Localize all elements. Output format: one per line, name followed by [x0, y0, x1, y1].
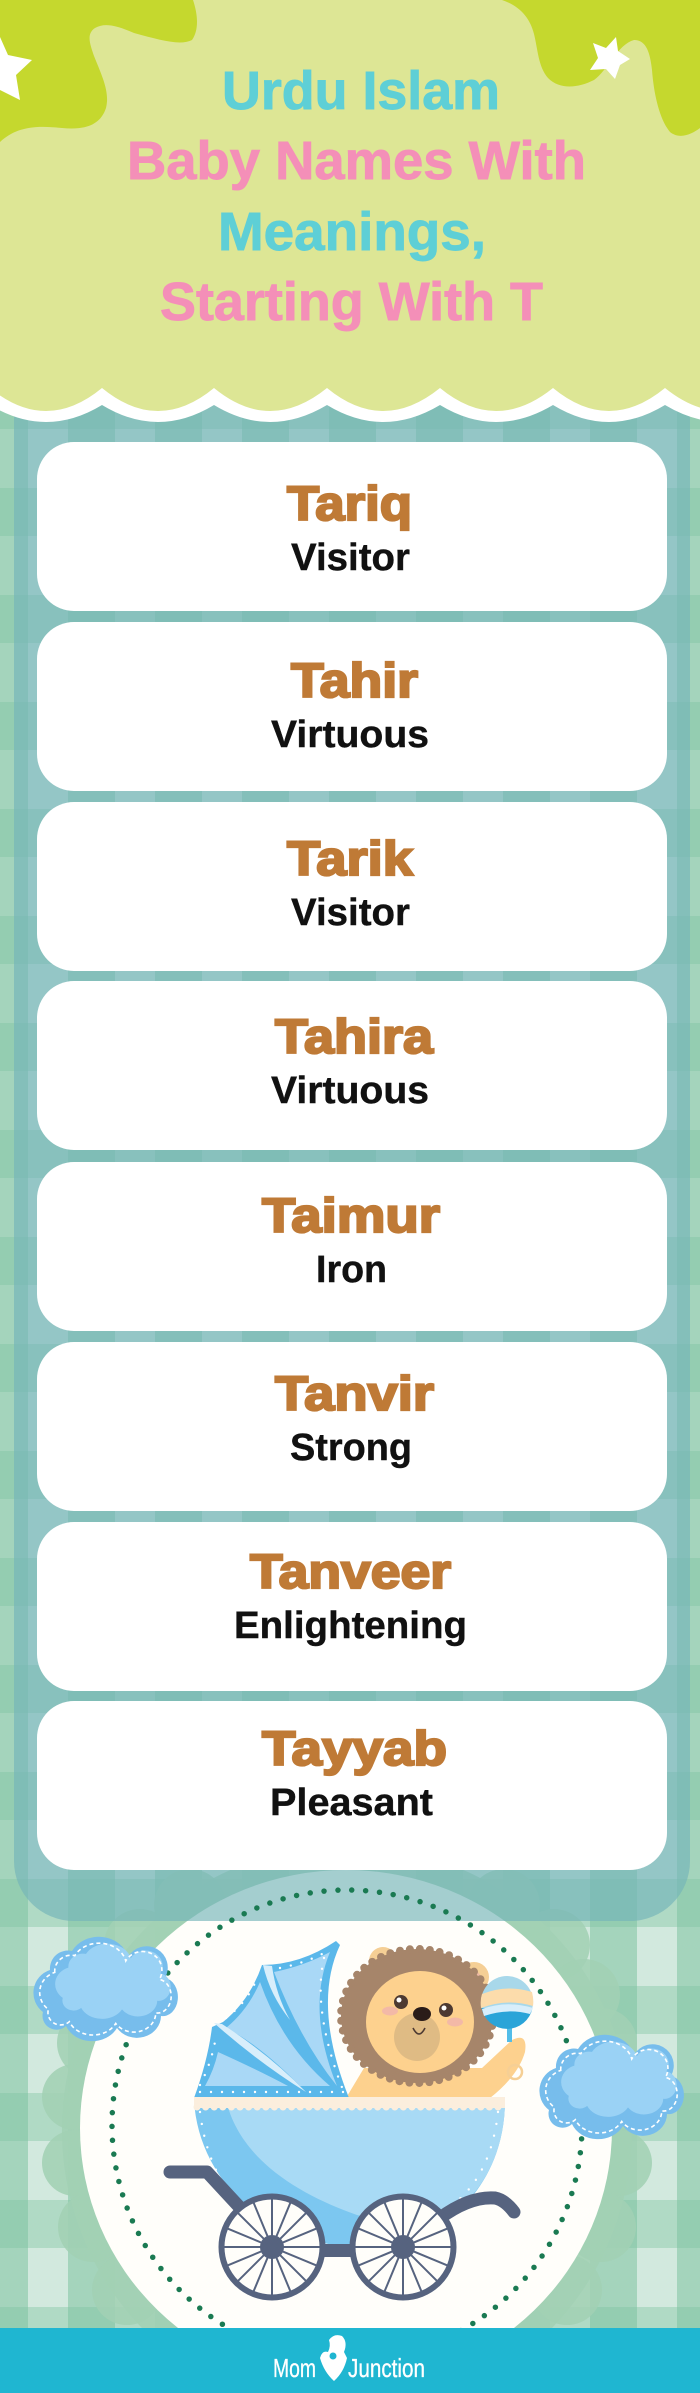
logo text right: Junction	[348, 2353, 425, 2383]
title line 3: Meanings,	[218, 202, 486, 262]
rattle cream band	[481, 1988, 533, 2008]
lion ear left	[369, 1947, 397, 1975]
name: Taimur	[262, 1190, 440, 1243]
lime blob top right	[502, 0, 700, 136]
meaning: Virtuous	[271, 1070, 429, 1112]
logo text left: Mom	[273, 2353, 316, 2383]
card: Tanvir	[37, 1342, 667, 1511]
lime blob top left	[0, 0, 197, 142]
handle left	[170, 2172, 244, 2212]
name: Tahir	[291, 655, 418, 708]
wheel right	[352, 2196, 454, 2298]
canopy silhouette	[194, 1941, 349, 2098]
header background	[0, 0, 700, 411]
card: Tarik	[37, 802, 667, 971]
cream circle behind stroller	[80, 1870, 612, 2328]
scalloped white edge	[0, 0, 700, 422]
logo icon: mother and child	[320, 2335, 347, 2381]
canopy stitches	[200, 1949, 346, 2092]
title line 2: Baby Names With	[127, 131, 586, 191]
basket rim	[194, 2097, 505, 2108]
translucent list panel	[14, 360, 690, 1921]
card: Tayyab	[37, 1701, 667, 1870]
card: Tahira	[37, 981, 667, 1150]
canopy panel back	[274, 1952, 337, 2086]
rattle lower half	[482, 2008, 532, 2029]
meaning: Virtuous	[271, 714, 429, 756]
scalloped green badge behind circle	[42, 1870, 652, 2328]
lion body and arm	[346, 2038, 525, 2098]
basket stitches	[200, 2112, 498, 2210]
name: Tanvir	[275, 1368, 434, 1421]
card: Tanveer	[37, 1522, 667, 1691]
meaning: Strong	[290, 1427, 412, 1469]
axle	[320, 2244, 356, 2257]
dotted ring	[112, 1890, 582, 2360]
name: Tariq	[287, 478, 412, 531]
title line 1: Urdu Islam	[222, 61, 500, 121]
lion ear right	[459, 1962, 489, 1992]
cloud right	[539, 2035, 684, 2139]
star right	[590, 37, 630, 79]
logo	[273, 2335, 425, 2383]
handle right	[440, 2198, 514, 2218]
name: Tayyab	[262, 1723, 447, 1776]
cloud left	[33, 1937, 178, 2041]
canopy panel low	[205, 2052, 288, 2086]
lion hand ring	[508, 2065, 522, 2079]
meaning: Visitor	[291, 892, 410, 934]
rattle ball	[481, 1976, 533, 2028]
lion face	[366, 1971, 474, 2073]
footer band	[0, 2328, 700, 2393]
meaning: Pleasant	[270, 1782, 433, 1824]
stroller	[170, 1941, 514, 2298]
title line 4: Starting With T	[160, 272, 543, 332]
star left	[0, 37, 32, 100]
meaning: Enlightening	[234, 1605, 467, 1647]
lion	[341, 1947, 525, 2098]
lion muzzle	[394, 2013, 440, 2061]
rattle	[481, 1976, 533, 2042]
meaning: Iron	[316, 1249, 387, 1291]
lion nose	[413, 2007, 431, 2021]
card: Tahir	[37, 622, 667, 791]
name: Tahira	[275, 1011, 433, 1064]
lion eyes	[394, 1995, 453, 2017]
canopy highlights	[214, 1965, 306, 2092]
basket inner light	[226, 2100, 505, 2225]
name: Tarik	[287, 833, 413, 886]
lion cheeks	[382, 2006, 463, 2026]
basket	[194, 2100, 505, 2246]
card: Tariq	[37, 442, 667, 611]
rattle handle	[507, 2026, 512, 2042]
header	[0, 0, 700, 422]
title	[127, 61, 586, 332]
canopy panel middle	[226, 1982, 330, 2086]
rattle pale stripe	[482, 2004, 533, 2016]
canopy	[194, 1941, 349, 2098]
card: Taimur	[37, 1162, 667, 1331]
wheel left	[222, 2196, 322, 2298]
meaning: Visitor	[291, 537, 410, 579]
lion mane	[341, 1949, 493, 2083]
name: Tanveer	[250, 1546, 451, 1599]
lion mouth	[413, 2028, 425, 2034]
